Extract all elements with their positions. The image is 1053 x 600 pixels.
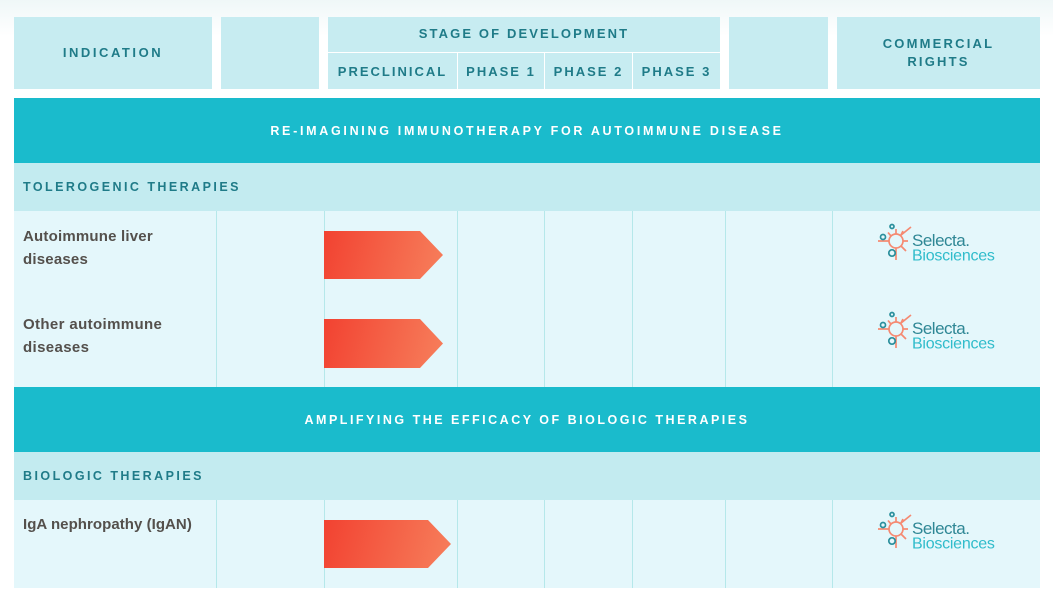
logo: Selecta Biosciences row 1 bbox=[878, 224, 995, 264]
header: phase 3: PHASE 3 bbox=[642, 64, 711, 79]
logo: Selecta Biosciences row 3: Selecta. bbox=[912, 519, 969, 538]
arrow: other autoimmune diseases preclinical bbox=[324, 319, 443, 368]
arrow: IgA nephropathy preclinical bbox=[324, 520, 451, 568]
logo: Selecta Biosciences row 1: Selecta. bbox=[912, 231, 969, 250]
header: commercial rights: RIGHTS bbox=[907, 54, 970, 69]
header: phase 2: PHASE 2 bbox=[554, 64, 623, 79]
subheading: tolerogenic therapies bbox=[14, 163, 1040, 211]
label: other autoimmune diseases: Other autoimmune bbox=[23, 316, 162, 333]
label: other autoimmune diseases bbox=[23, 316, 162, 356]
panel: tolerogenic rows bbox=[14, 211, 1040, 387]
label: other autoimmune diseases: diseases bbox=[23, 339, 89, 356]
logo: Selecta Biosciences row 2: Selecta. bbox=[912, 319, 969, 338]
label: autoimmune liver diseases: Autoimmune liver bbox=[23, 228, 153, 245]
logo: Selecta Biosciences row 3: Biosciences bbox=[912, 536, 995, 552]
logo: Selecta Biosciences row 1: Biosciences bbox=[912, 248, 995, 264]
section banner: autoimmune disease bbox=[14, 98, 1040, 163]
panel: biologic row bbox=[14, 500, 1040, 588]
header: preclinical: PRECLINICAL bbox=[338, 64, 447, 79]
label: autoimmune liver diseases bbox=[23, 228, 153, 268]
header: phase 1 bbox=[458, 53, 544, 89]
header: commercial rights: COMMERCIAL bbox=[883, 36, 994, 51]
header: phase 3 bbox=[633, 53, 720, 89]
label: autoimmune liver diseases: diseases bbox=[23, 251, 88, 268]
logo: Selecta Biosciences row 2 bbox=[878, 312, 995, 352]
section banner: biologic efficacy bbox=[14, 387, 1040, 452]
header: indication bbox=[14, 17, 212, 89]
section banner: autoimmune disease: RE-IMAGINING IMMUNOTHERAPY FOR AUTOIMMUNE DISEASE bbox=[270, 124, 784, 138]
subheading: tolerogenic therapies: TOLEROGENIC THERAPIES bbox=[23, 180, 241, 194]
arrow: autoimmune liver diseases preclinical bbox=[324, 231, 443, 279]
logo: Selecta Biosciences row 2: Biosciences bbox=[912, 336, 995, 352]
header: stage of development bbox=[328, 17, 720, 52]
section banner: biologic efficacy: AMPLIFYING THE EFFICACY OF BIOLOGIC THERAPIES bbox=[305, 412, 749, 426]
header: blank column bbox=[221, 17, 319, 89]
logo: Selecta Biosciences row 3 bbox=[878, 512, 995, 552]
subheading: biologic therapies bbox=[14, 452, 1040, 500]
header: preclinical bbox=[328, 53, 457, 89]
header: phase 2 bbox=[545, 53, 632, 89]
label: IgA nephropathy: IgA nephropathy (IgAN) bbox=[23, 516, 192, 533]
header: phase 1: PHASE 1 bbox=[466, 64, 536, 79]
header: commercial rights bbox=[837, 17, 1040, 89]
header: stage of development: STAGE OF DEVELOPMENT bbox=[419, 26, 629, 40]
header: blank column right bbox=[729, 17, 828, 89]
subheading: biologic therapies: BIOLOGIC THERAPIES bbox=[23, 469, 204, 483]
header: indication: INDICATION bbox=[63, 45, 163, 60]
